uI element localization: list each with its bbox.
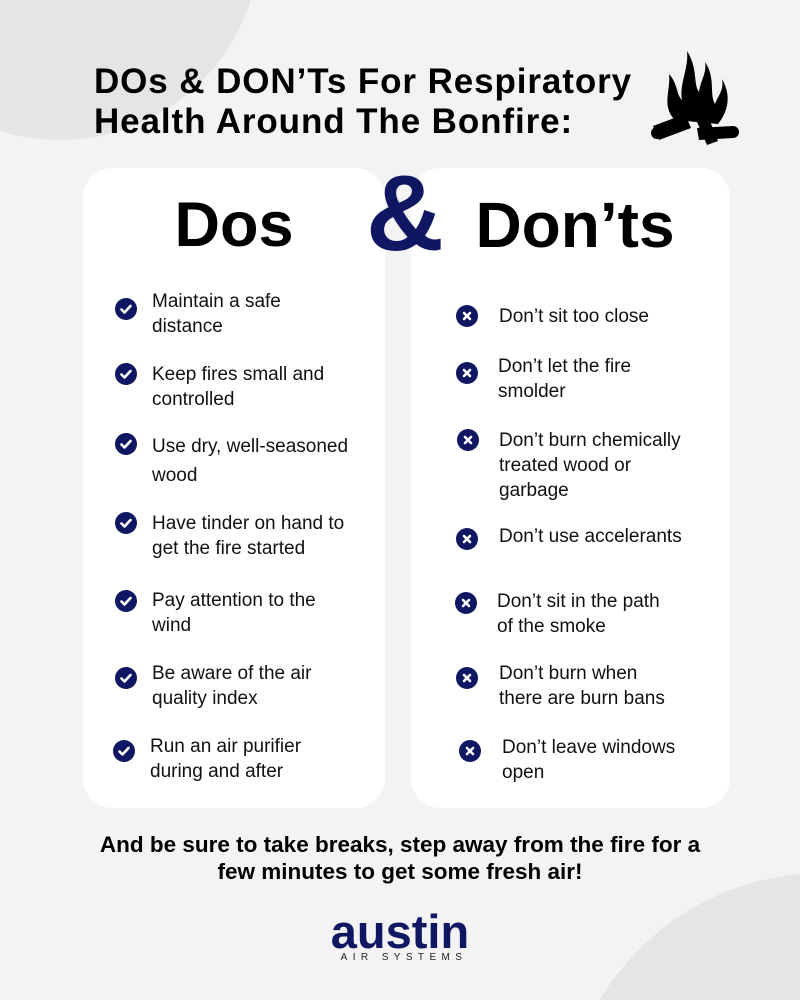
item donts 7: Don’t leave windows	[502, 737, 675, 758]
item dos 6: Be aware of the air	[152, 663, 311, 684]
item dos 5: Pay attention to the	[152, 590, 316, 611]
item donts 2	[456, 356, 631, 402]
item dos 1: Maintain a safe	[152, 291, 281, 312]
item dos 5: wind	[152, 615, 191, 636]
icon: bonfire	[651, 51, 739, 145]
panel: donts	[411, 168, 730, 808]
item donts 3: Don’t burn chemically	[499, 430, 681, 451]
item donts 6: Don’t burn when	[499, 663, 637, 684]
item donts 5: of the smoke	[497, 616, 606, 637]
item dos 3: Use dry, well-seasoned	[152, 436, 348, 457]
item dos 6: quality index	[152, 688, 258, 709]
list: donts	[455, 305, 682, 783]
logo: austin air systems: austin	[331, 905, 469, 958]
title: DOs & DON’Ts For Respiratory	[94, 62, 632, 101]
logo: austin air systems: AIR SYSTEMS	[341, 952, 467, 963]
item dos 7: Run an air purifier	[150, 736, 301, 757]
footer note	[100, 832, 700, 884]
item donts 1: Don’t sit too close	[499, 306, 649, 327]
title: Health Around The Bonfire:	[94, 102, 573, 141]
item donts 3: garbage	[499, 480, 569, 501]
item donts 6	[456, 663, 665, 709]
item donts 3: treated wood or	[499, 455, 631, 476]
item dos 4: get the fire started	[152, 538, 305, 559]
item dos 2: controlled	[152, 389, 234, 410]
item dos 2	[115, 363, 324, 410]
item donts 2: Don’t let the fire	[498, 356, 631, 377]
item donts 5	[455, 591, 660, 637]
footer note: And be sure to take breaks, step away from the fire for a	[100, 832, 700, 857]
item dos 3: wood	[152, 465, 197, 486]
heading: Dos: Dos	[174, 190, 294, 260]
item donts 7: open	[502, 762, 544, 783]
item dos 6	[115, 663, 312, 709]
item dos 4	[115, 512, 344, 559]
item dos 4: Have tinder on hand to	[152, 513, 344, 534]
item dos 1	[115, 291, 281, 337]
item donts 7	[459, 737, 675, 783]
item dos 5	[115, 590, 316, 636]
item donts 5: Don’t sit in the path	[497, 591, 660, 612]
item donts 3	[457, 429, 681, 501]
item dos 7	[113, 736, 301, 782]
item donts 6: there are burn bans	[499, 688, 665, 709]
item dos 1: distance	[152, 316, 223, 337]
panel: dos	[83, 168, 385, 808]
item donts 4: Don’t use accelerants	[499, 526, 682, 547]
item dos 3	[115, 433, 348, 486]
item dos 7: during and after	[150, 761, 283, 782]
item dos 2: Keep fires small and	[152, 364, 324, 385]
item donts 2: smolder	[498, 381, 566, 402]
heading: Don'ts: Don’ts	[475, 189, 675, 261]
title	[94, 62, 632, 141]
ampersand: &	[366, 152, 444, 273]
list: dos	[113, 291, 348, 782]
footer note: few minutes to get some fresh air!	[217, 859, 583, 884]
